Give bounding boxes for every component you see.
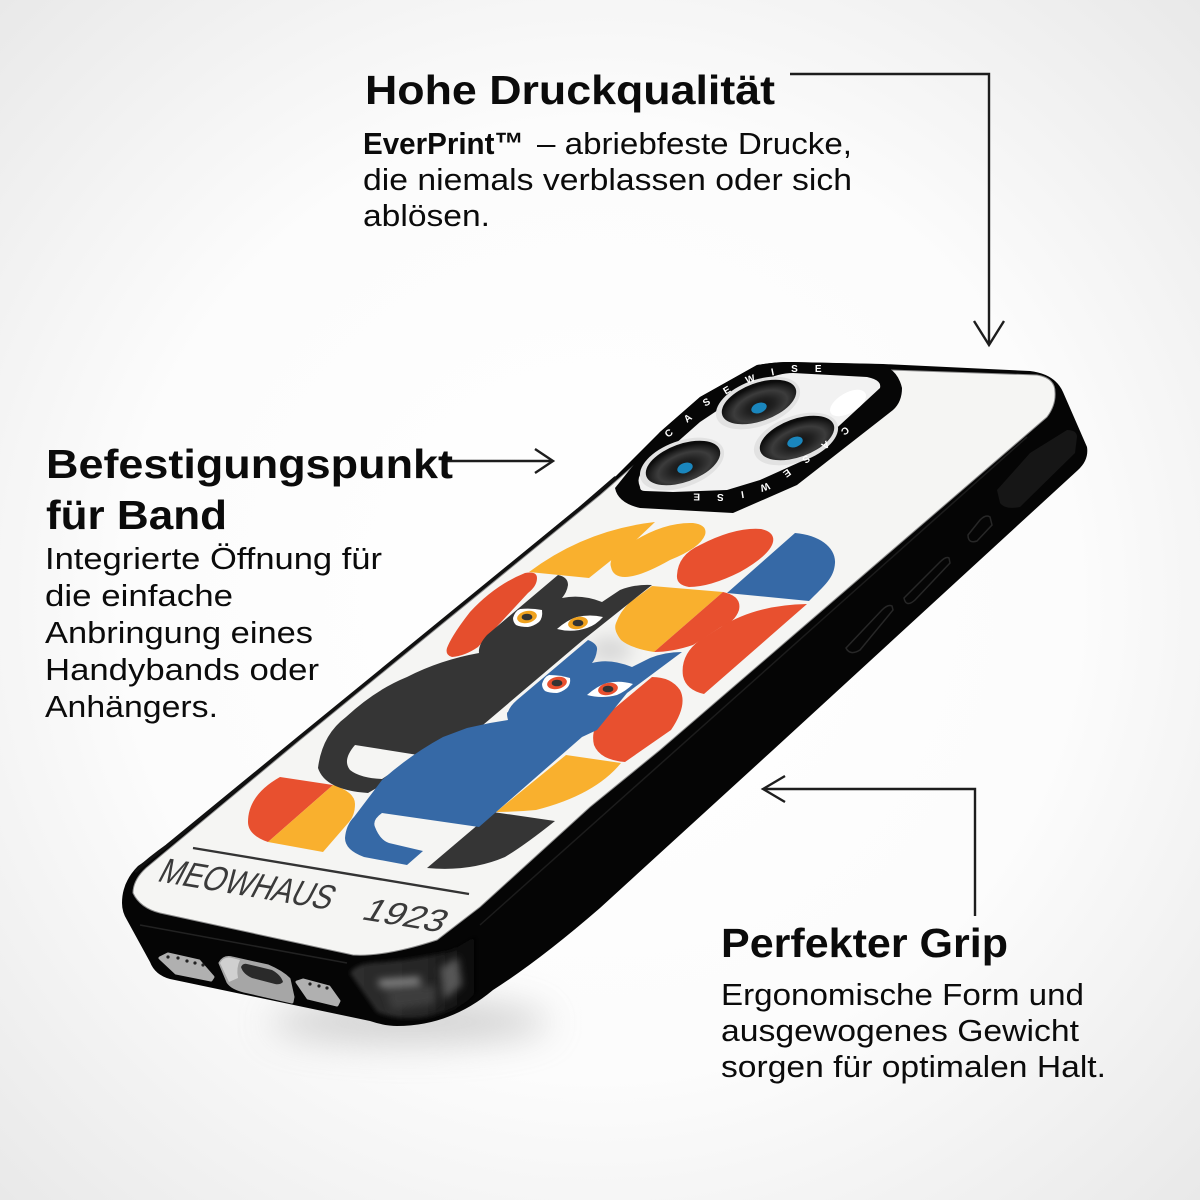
heading: strap attachment: für Band <box>46 492 227 538</box>
body: strap attachment: Anbringung eines <box>45 615 313 650</box>
lens left <box>633 427 731 501</box>
ring text bottom: CASEWISE <box>694 427 849 501</box>
blue cat right eye <box>587 681 633 697</box>
body: strap attachment: die einfache <box>45 578 233 613</box>
red and orange half circle bottom left <box>248 777 355 852</box>
body: grip: ausgewogenes Gewicht <box>721 1013 1079 1048</box>
text block: strap attachment <box>45 441 453 724</box>
body: print quality: EverPrint™ <box>363 126 524 161</box>
arrow: grip <box>763 776 975 916</box>
orange half circle top left <box>529 522 655 578</box>
bottom ledge line <box>140 925 347 963</box>
phone shadow <box>270 1000 550 1044</box>
soft grey shadow behind cats <box>588 636 632 664</box>
artwork divider line <box>193 848 469 894</box>
text block: grip <box>721 920 1106 1084</box>
body: grip <box>721 977 1106 1084</box>
orange lower half circle <box>496 755 621 812</box>
heading: print quality: Hohe Druckqualität <box>365 67 775 113</box>
artwork shapes <box>152 522 835 939</box>
body: print quality: die niemals verblassen oder sich <box>363 162 852 197</box>
black cat paw gap <box>347 745 418 779</box>
blue half circle <box>727 533 835 601</box>
text block: print quality <box>363 67 852 233</box>
black cat right eye <box>557 615 603 631</box>
artwork title: MEOWHAUS <box>152 852 343 917</box>
body: print quality: – abriebfeste Drucke, <box>537 126 852 161</box>
red mid shape <box>654 592 739 652</box>
orange ellipse top <box>610 523 706 577</box>
body: strap attachment <box>45 541 382 724</box>
side buttons <box>846 516 992 653</box>
red big half circle <box>683 604 807 694</box>
black lower half circle <box>427 812 555 869</box>
body: strap attachment: Integrierte Öffnung für <box>45 541 382 576</box>
red lower half circle <box>593 677 683 762</box>
screen printed back <box>133 370 1055 955</box>
blue cat left eye <box>542 675 570 693</box>
corner gloss <box>350 936 476 1018</box>
bottom ports <box>160 954 339 1005</box>
heading: strap attachment: Befestigungspunkt <box>46 441 453 487</box>
body: strap attachment: Handybands oder <box>45 652 319 687</box>
blue cat <box>345 640 682 865</box>
body: print quality: ablösen. <box>363 198 490 233</box>
camera ring <box>615 362 902 513</box>
red ellipse top <box>677 529 773 587</box>
arrow: print quality <box>790 74 1004 345</box>
body: print quality <box>363 126 852 233</box>
left edge outline <box>136 478 615 871</box>
case body <box>122 362 1087 1026</box>
left speaker <box>160 954 213 980</box>
lens right <box>747 402 845 476</box>
body: strap attachment: Anhängers. <box>45 689 218 724</box>
orange mid shape <box>615 586 723 652</box>
black cat left eye <box>513 609 542 627</box>
red capsule left <box>447 573 537 657</box>
charging port <box>220 958 293 1002</box>
lens top <box>709 366 807 440</box>
arrow: strap attachment <box>447 449 553 473</box>
side inner ledge line <box>480 437 1027 925</box>
camera opening <box>638 373 880 492</box>
flash <box>826 384 870 422</box>
ring text top: CASEWISE <box>665 365 822 436</box>
body: grip: Ergonomische Form und <box>721 977 1084 1012</box>
artwork year: 1923 <box>356 892 456 939</box>
heading: strap attachment <box>46 441 453 538</box>
lanyard attachment side detail <box>997 430 1077 508</box>
phone case <box>122 362 1088 1026</box>
body: grip: sorgen für optimalen Halt. <box>721 1049 1106 1084</box>
right speaker <box>297 980 339 1005</box>
black cat <box>318 575 652 793</box>
heading: grip: Perfekter Grip <box>721 920 1008 966</box>
